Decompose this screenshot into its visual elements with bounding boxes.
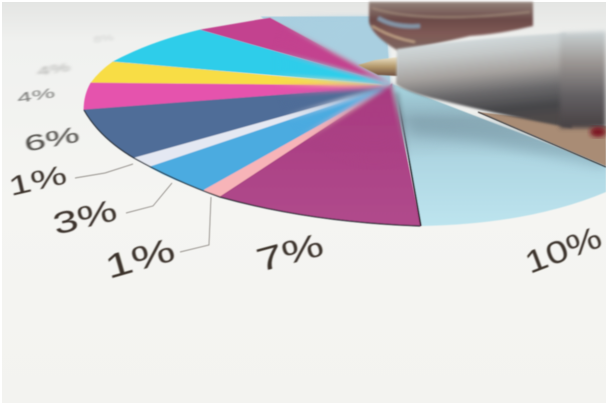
label: 1% lower: 1% bbox=[101, 230, 179, 286]
percentage labels bbox=[6, 33, 606, 286]
slice: light blue top bbox=[262, 17, 390, 88]
label: 4%: 4% bbox=[16, 85, 56, 106]
label: 3%: 3% bbox=[49, 193, 121, 242]
label: 1%: 1% bbox=[6, 160, 70, 202]
pie outline bbox=[84, 110, 420, 226]
pen shadow on chart bbox=[410, 118, 606, 168]
pen cone bbox=[396, 33, 572, 128]
leader lines bbox=[75, 164, 211, 252]
slice: dark blue bbox=[84, 87, 388, 158]
pen barrel bbox=[560, 31, 606, 128]
slice: magenta top bbox=[200, 18, 388, 82]
pen tip bbox=[358, 57, 398, 76]
label: 7%: 7% bbox=[253, 227, 327, 279]
label: 10%: 10% bbox=[520, 219, 606, 281]
slice: pink bbox=[84, 83, 388, 110]
slice: cyan bbox=[113, 30, 388, 84]
slice: white bbox=[134, 87, 388, 167]
slice: purple bbox=[220, 84, 420, 226]
slice: blue bbox=[150, 87, 388, 190]
pen reflection bbox=[478, 112, 606, 166]
label: 4% far: 4% bbox=[36, 61, 71, 79]
slice divider: purple and pale blue bbox=[397, 92, 421, 226]
pen edge shadow bbox=[478, 112, 606, 167]
pie chart bbox=[84, 17, 606, 226]
label: 6%: 6% bbox=[22, 122, 81, 157]
slice: pale pink bbox=[204, 87, 388, 197]
pen bbox=[358, 31, 606, 137]
red clip glimpse bbox=[590, 127, 606, 137]
apex focus blur bbox=[277, 14, 454, 156]
slice: pale blue bbox=[392, 84, 606, 226]
coin body bbox=[369, 2, 533, 52]
label: faint far: 8% bbox=[93, 33, 115, 45]
coin stack bbox=[369, 2, 533, 52]
slice: yellow bbox=[91, 62, 388, 86]
